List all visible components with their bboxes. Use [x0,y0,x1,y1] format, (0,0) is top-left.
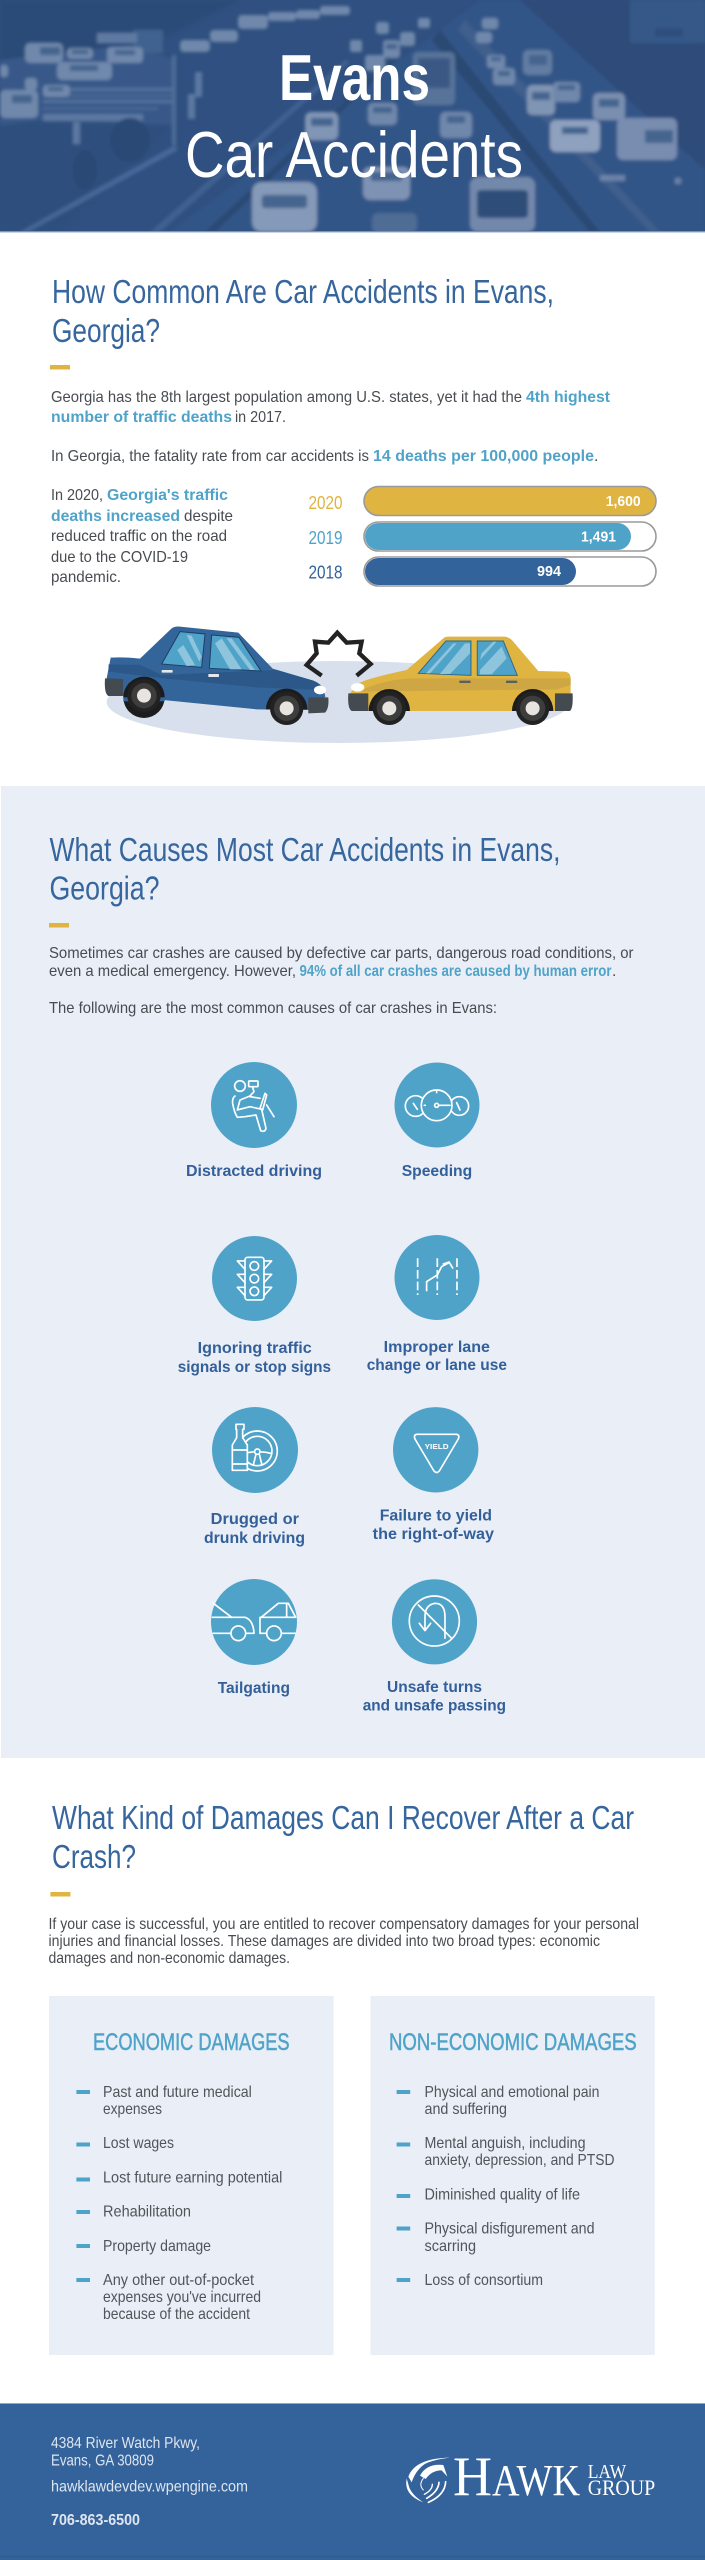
bar 2020: 2020 [308,493,342,513]
cause: distracted driving: Distracted driving [186,1163,322,1180]
paragraph: 2020 increase: Georgia's traffic [107,487,228,504]
contact details: hawklawdevdev.wpengine.com [51,2479,248,2496]
paragraph: 2020 increase: pandemic. [51,569,121,586]
logo: Hawk Law Group [406,2446,655,2508]
cause: failure to yield: Failure to yield [380,1508,492,1525]
cause: failure to yield [373,1407,494,1543]
cause: drugged or drunk driving [204,1407,305,1547]
paragraph: list intro: The following are the most common causes of car crashes in Evans: [49,1000,497,1017]
logo: Hawk Law Group: GROUP [588,2475,655,2500]
paragraph: compensatory damages: If your case is successful, you are entitled to recover compensatory damages for your personal [48,1916,639,1933]
logo: Hawk Law Group: LAW [588,2461,626,2483]
contact details: 706-863-6500 [51,2512,140,2529]
cause: ignoring signals: signals or stop signs [178,1359,331,1376]
list [76,2084,282,2323]
paragraph: 2020 increase: despite [184,508,233,525]
cause: improper lane change [367,1235,507,1374]
contact details: Evans, GA 30809 [51,2453,154,2470]
paragraph: population: Georgia has the 8th largest population among U.S. states, yet it had the [51,389,522,406]
list: Rehabilitation [103,2204,191,2220]
cause: unsafe turns: and unsafe passing [363,1698,506,1715]
bar 2020 [308,486,656,516]
logo: Hawk Law Group: AWK [492,2456,580,2505]
heading [50,831,560,906]
list: expenses you've incurred [103,2289,261,2306]
illustration: two cars colliding [105,627,573,743]
list: Past and future medical [103,2084,252,2101]
cause: failure to yield: the right-of-way [373,1526,494,1543]
list: expenses [103,2101,162,2118]
paragraph: population: in 2017. [235,409,286,426]
cause: drugged or drunk driving: Drugged or [211,1511,299,1528]
logo: Hawk Law Group: H [453,2446,492,2508]
list: Mental anguish, including [424,2135,586,2152]
heading: Georgia? [50,870,160,906]
paragraph: 2020 increase: reduced traffic on the road [51,528,227,545]
paragraph: 2020 increase: In 2020, [51,487,103,504]
traffic photo background [0,0,705,233]
cause: unsafe turns [363,1579,506,1715]
list: anxiety, depression, and PTSD [424,2152,614,2169]
cause: ignoring signals [178,1236,331,1376]
panel: non-economic damages [370,1996,655,2355]
paragraph: population [51,389,611,426]
paragraph: human error: even a medical emergency. However, [49,963,296,980]
list: Any other out-of-pocket [103,2272,255,2289]
yellow car [348,637,573,725]
paragraph: human error [49,945,634,980]
list: Physical and emotional pain [424,2084,600,2101]
paragraph: 2020 increase: due to the COVID-19 [51,549,188,566]
heading: Crash? [52,1838,136,1875]
cause: improper lane change: change or lane use [367,1357,507,1374]
cause: tailgating [211,1579,297,1697]
heading: Georgia? [52,312,160,349]
cause: drugged or drunk driving: drunk driving [204,1530,305,1547]
heading [52,1799,634,1875]
icon: eagle head [406,2458,450,2502]
list: Diminished quality of life [424,2186,580,2203]
bar 2018: 2018 [308,562,342,582]
contact details: 4384 River Watch Pkwy, [51,2435,200,2452]
bar 2020: 1,600 [606,493,641,510]
paragraph: fatality rate: In Georgia, the fatality rate from car accidents is [51,448,369,465]
list: Physical disfigurement and [424,2221,594,2238]
gold rule [49,923,69,928]
list: Property damage [103,2238,211,2255]
list: and suffering [424,2101,507,2118]
cause: unsafe turns: Unsafe turns [387,1679,482,1696]
paragraph: human error: 94% of all car crashes are caused by human error [300,963,612,980]
heading [52,273,554,349]
blue car [105,627,328,725]
cause: improper lane change: Improper lane [384,1339,490,1356]
gold rule [50,365,70,370]
bar 2019: 2019 [308,528,342,548]
header banner [0,0,705,233]
paragraph: fatality rate: . [594,448,598,465]
cause: speeding [394,1062,480,1180]
paragraph: compensatory damages: damages and non-economic damages. [48,1950,290,1967]
title: Car Accidents [185,118,523,191]
section: damages [48,1799,655,2355]
paragraph: population: number of traffic deaths [51,409,232,426]
gold rule [50,1892,70,1896]
section: how common [50,273,656,743]
paragraph: fatality rate: 14 deaths per 100,000 people [373,448,594,465]
cause: speeding: Speeding [402,1163,472,1180]
paragraph: human error: . [612,963,616,980]
cause: ignoring signals: Ignoring traffic [198,1340,312,1357]
bar 2019: 1,491 [581,528,616,546]
paragraph: compensatory damages [48,1916,639,1967]
paragraph: human error: Sometimes car crashes are caused by defective car parts, dangerous road conditions, or [49,945,634,962]
footer [0,2403,705,2560]
cause: failure to yield: YIELD [425,1444,449,1451]
list: Lost future earning potential [103,2170,282,2186]
list: Loss of consortium [424,2272,543,2289]
list: because of the accident [103,2306,250,2323]
bar 2018: 994 [537,563,562,580]
list [397,2084,614,2289]
heading: What Causes Most Car Accidents in Evans, [50,831,560,868]
bar chart: traffic deaths by year [308,486,656,586]
cause: distracted driving [186,1062,322,1180]
crash burst [307,633,371,676]
paragraph: 2020 increase [51,487,233,586]
paragraph: population: 4th highest [526,389,611,406]
list: scarring [424,2238,476,2255]
heading: How Common Are Car Accidents in Evans, [52,273,554,310]
cause: tailgating: Tailgating [218,1680,290,1697]
contact details [51,2435,248,2529]
panel title: ECONOMIC DAMAGES [93,2029,290,2056]
bar 2019 [308,522,656,551]
section background [1,786,705,1758]
paragraph: 2020 increase: deaths increased [51,508,180,525]
bar 2018 [308,557,656,586]
paragraph: compensatory damages: injuries and financial losses. These damages are divided into two broad types: economic [48,1933,600,1950]
section: causes [1,786,705,1758]
title [185,41,523,191]
panel title: NON-ECONOMIC DAMAGES [389,2029,637,2056]
panel: economic damages [49,1996,334,2355]
list: Lost wages [103,2135,174,2152]
title: Evans [279,41,430,114]
paragraph: fatality rate [51,448,598,465]
